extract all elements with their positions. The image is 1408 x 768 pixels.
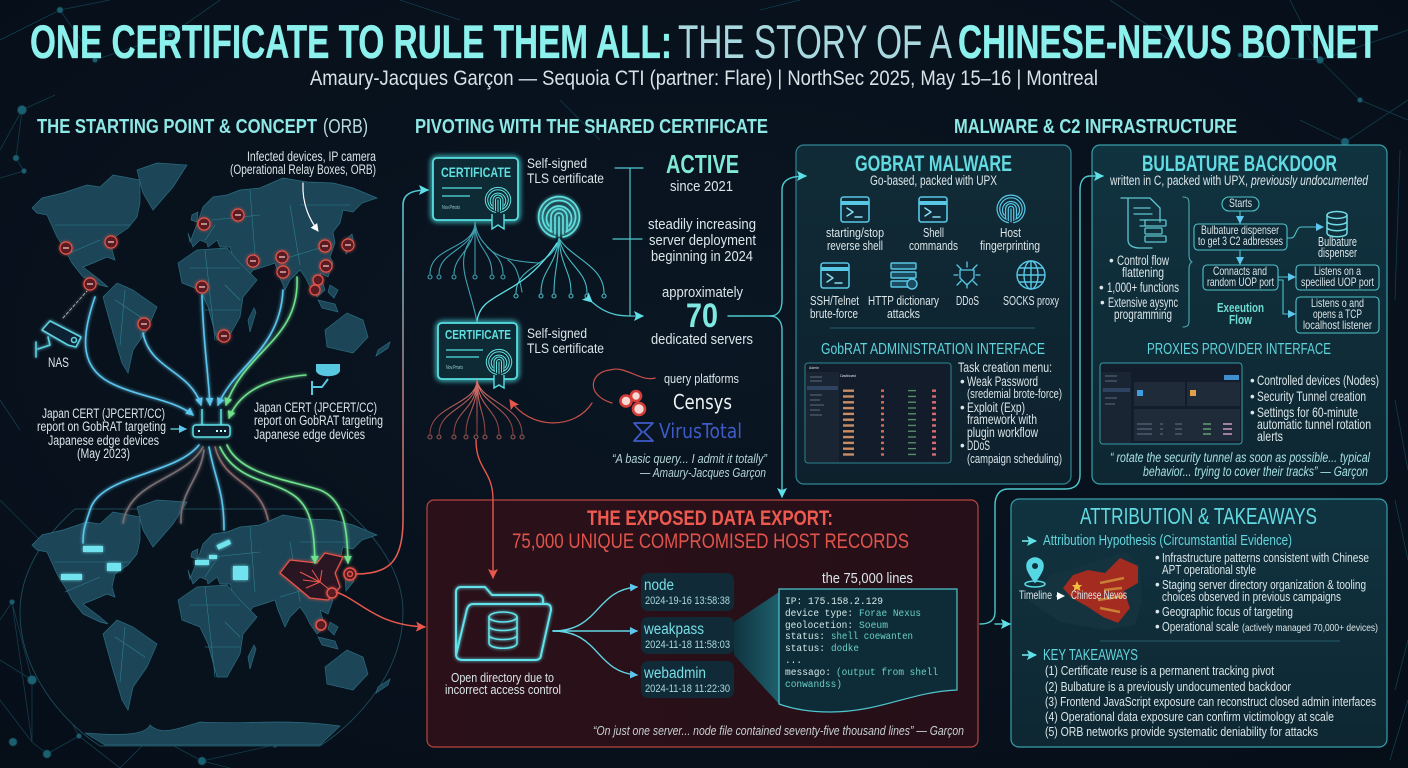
text: Bulbature features: Extensive aysync: [1108, 295, 1178, 310]
flowchart: execution flow: Exeeution: [1217, 300, 1264, 315]
text: Japan CERT left: [37, 406, 186, 461]
icon: open directory folder: [456, 587, 551, 660]
heading: starting point: (ORB): [323, 116, 368, 138]
map: China attribution: [1019, 552, 1142, 630]
capability: reverse shell: [826, 197, 884, 253]
capability: HTTP dictionary: HTTP dictionary: [868, 293, 939, 308]
icon: certificate one: CERTIFICATE: [441, 164, 511, 180]
flowchart: execution flow: to get 3 C2 adbresses: [1198, 234, 1283, 248]
document: sample record: ...: [785, 655, 802, 667]
heading: exposed data export: THE EXPOSED DATA EXPORT:: [587, 507, 833, 530]
card: weakpass file: 2024-11-18 11:58:03: [645, 639, 730, 651]
arrows: folder to files: [553, 587, 637, 675]
query platforms: query platforms: [664, 372, 739, 386]
text: Bulbature features: •: [1109, 253, 1114, 268]
subheading: proxies provider: PROXIES PROVIDER INTERFACE: [1147, 341, 1331, 358]
text: Japan CERT left: (May 2023): [77, 446, 130, 461]
text: task creation menu: DDoS: [967, 438, 990, 453]
card: webadmin file: 2024-11-18 11:22:30: [645, 683, 730, 695]
map: China attribution: Chinese Nevos: [1071, 588, 1127, 602]
list: attribution evidence: •: [1155, 550, 1160, 565]
icon: dome camera: [312, 364, 340, 395]
text: proxies features: [1250, 372, 1379, 444]
capability: DDoS: [954, 262, 980, 308]
subheading: previously undocumented: [1250, 173, 1368, 188]
icon: certificate two: Nov.Pmxts: [446, 365, 463, 371]
text: self-signed two: [527, 326, 604, 356]
text: task creation menu: Exploit (Exp): [967, 400, 1025, 415]
capability: SSH brute force: brute-force: [810, 306, 858, 321]
arrow: China to certificate pivot: [357, 190, 428, 574]
subheading: attribution hypothesis: Attribution Hypothesis (Circumstantial Evidence): [1043, 533, 1292, 549]
icon: database dispenser: Bulbature: [1318, 235, 1357, 249]
text: open directory: [445, 670, 561, 697]
list: attribution evidence: •: [1155, 619, 1160, 634]
icon: certificate one: Nov.Pmxts: [442, 205, 460, 211]
document: sample record: messago:: [785, 667, 831, 679]
heading: starting point: THE STARTING POINT & CONCEPT: [37, 116, 317, 138]
icon: certificate two: [438, 323, 517, 388]
capability: DDoS: DDoS: [956, 293, 979, 308]
document: sample record: geolocetion:: [785, 620, 853, 632]
capability: reverse shell: reverse shell: [827, 238, 883, 253]
stat: active since 2021: ACTIVE: [666, 149, 739, 179]
list: attribution evidence: Geographic focus of targeting: [1162, 604, 1293, 619]
screenshot: GobRAT dashboard: Dashboard: [840, 373, 856, 378]
chart: lower world map of targets: [20, 500, 403, 746]
red target markers: [316, 568, 356, 630]
text: proxies features: alerts: [1257, 428, 1283, 444]
screenshot: proxies dashboard: [1100, 363, 1242, 444]
text: proxies features: Security Tunnel creation: [1257, 388, 1366, 404]
label: NAS: NAS: [48, 355, 69, 370]
title: ONE CERTIFICATE TO RULE THEM ALL:: [30, 15, 672, 68]
text: task creation menu: framework with: [967, 412, 1037, 427]
flowchart: execution flow: Starts: [1229, 196, 1252, 210]
flowchart: execution flow: opens a TCP: [1313, 307, 1362, 321]
chart: upper world map of infected relay boxes: [32, 163, 390, 373]
quote: rotate the tunnel: [1110, 450, 1371, 479]
capability: SOCKS proxy: SOCKS proxy: [1003, 293, 1059, 308]
title: [30, 15, 1378, 68]
text: Bulbature features: •: [1100, 295, 1105, 310]
quote: basic query: “A basic query... I admit it totally”: [612, 452, 768, 466]
flowchart: execution flow: Flow: [1229, 312, 1253, 327]
document: sample record: dodke: [831, 643, 859, 655]
document: sample record: Forae Nexus: [859, 608, 921, 620]
list: key takeaways: (1) Certificate reuse is a permanent tracking pivot: [1045, 663, 1274, 678]
panel: pivoting with the shared certificate: [415, 116, 768, 480]
document: sample record: status:: [785, 631, 825, 643]
list: attribution evidence: •: [1155, 577, 1160, 592]
text: Japan CERT left: Japan CERT (JPCERT/CC): [42, 406, 165, 421]
text: proxies features: •: [1250, 405, 1255, 420]
card: weakpass file: weakpass: [643, 621, 704, 638]
capability: shell commands: Shell: [923, 225, 944, 240]
capability: shell commands: [909, 197, 958, 253]
text: proxies features: automatic tunnel rotation: [1257, 416, 1371, 432]
capability: SSH brute force: SSH/Telnet: [810, 293, 859, 308]
heading: malware and C2: MALWARE & C2 INFRASTRUCTURE: [954, 116, 1237, 138]
text: Bulbature features: programming: [1114, 307, 1172, 322]
text: task creation menu: Weak Password: [967, 374, 1038, 389]
capability: SOCKS proxy: [1003, 261, 1059, 308]
label: the 75,000 lines: the 75,000 lines: [822, 571, 913, 587]
title: THE STORY OF A: [678, 15, 952, 68]
subheading: key takeaways: KEY TAKEAWAYS: [1043, 647, 1138, 664]
flowchart: execution flow: [1194, 196, 1379, 333]
list: attribution evidence: Operational scale: [1162, 619, 1239, 634]
heading: exposed data export: 75,000 UNIQUE COMPROMISED HOST RECORDS: [512, 530, 909, 553]
text: task creation menu: Task creation menu:: [958, 360, 1052, 375]
arrows: router to lower map: [83, 445, 348, 563]
China highlight: [280, 553, 343, 600]
panel: exposed data export: [427, 500, 978, 747]
flowchart: execution flow: localhost listener: [1303, 318, 1372, 332]
document: sample record: Soeum: [859, 620, 888, 632]
stat: active since 2021: since 2021: [670, 178, 733, 195]
tree: certificate two hosts: [428, 380, 524, 439]
arrow: China to data export: [336, 592, 425, 627]
logo: VirusTotal: VirusTotal: [659, 419, 742, 443]
list: key takeaways: (4) Operational data exposure can confirm victimology at scale: [1045, 709, 1334, 724]
logo: Censys: Censys: [673, 390, 732, 414]
callout: infected devices: (Operational Relay Boxes, ORB): [230, 162, 376, 177]
text: Bulbature features: •: [1099, 280, 1104, 295]
subheading: Go-based, packed with UPX: [870, 173, 997, 188]
icon: router: [193, 409, 230, 437]
text: self-signed one: TLS certificate: [527, 171, 604, 186]
text: Japan CERT right: Japanese edge devices: [254, 427, 365, 442]
text: Japan CERT right: [254, 400, 383, 442]
capability: HTTP dictionary: attacks: [887, 306, 920, 321]
icon: location pin: [1025, 558, 1045, 587]
text: task creation menu: •: [960, 438, 965, 453]
panel: GobRAT malware: [796, 145, 1071, 484]
heading: exposed data export: [512, 507, 909, 553]
capability: reverse shell: starting/stop: [826, 225, 884, 240]
capability: host fingerprinting: fingerprinting: [980, 238, 1040, 253]
stat: active since 2021: [666, 149, 739, 195]
capability: SSH brute force: [810, 263, 859, 321]
list: key takeaways: (5) ORB networks provide systematic deniability for attacks: [1045, 724, 1318, 739]
card: webadmin file: webadmin: [643, 665, 706, 682]
stat: approximately 70 servers: approximately: [662, 284, 743, 301]
flowchart: execution flow: random UOP port: [1207, 275, 1274, 289]
text: Japan CERT right: report on GobRAT targeting: [254, 413, 383, 428]
text: open directory: Open directory due to: [451, 670, 554, 685]
document: sample record: conwandss): [785, 679, 842, 691]
text: Bulbature features: [1099, 253, 1179, 322]
text: self-signed two: Self-signed: [527, 326, 587, 341]
document: sample record: IP: 175.158.2.129: [785, 596, 883, 608]
text: self-signed one: [527, 156, 604, 186]
subtitle: Amaury-Jacques Garçon — Sequoia CTI (partner: Flare) | NorthSec 2025, May 15–16 | Montreal: [310, 67, 1098, 90]
capability: host fingerprinting: Host: [1000, 225, 1021, 240]
card: node file: 2024-19-16 13:58:38: [645, 595, 730, 607]
capability: HTTP dictionary: [868, 263, 939, 321]
callout: infected devices: Infected devices, IP camera: [247, 149, 376, 164]
list: attribution evidence: APT operational style: [1162, 562, 1256, 577]
capability: host fingerprinting: [980, 195, 1040, 253]
text: self-signed one: Self-signed: [527, 156, 587, 171]
text: steadily increasing: [648, 216, 757, 265]
card: node file: [641, 573, 734, 611]
card: weakpass file: [641, 617, 734, 654]
stat: approximately 70 servers: dedicated servers: [651, 331, 753, 348]
text: proxies features: Settings for 60-minute: [1257, 404, 1358, 420]
card: node file: node: [644, 577, 674, 594]
list: attribution evidence: choices observed in previous campaigns: [1162, 589, 1341, 604]
arrow: tree to open directory: [476, 440, 493, 578]
document: sample record: (output from shell: [836, 667, 938, 679]
tree: fingerprint hosts: [477, 238, 606, 322]
icon: database dispenser: dispenser: [1318, 246, 1357, 260]
text: task creation menu: [958, 360, 1062, 466]
flowchart: execution flow: Listens o and: [1311, 296, 1364, 310]
subheading: key takeaways: [1022, 647, 1138, 664]
subheading: GobRAT admin: GobRAT ADMINISTRATION INTERFACE: [821, 341, 1045, 358]
device markers: [61, 539, 248, 580]
query platforms: [510, 369, 742, 443]
document: sample record: status:: [785, 643, 825, 655]
text: proxies features: •: [1250, 389, 1255, 404]
text: task creation menu: plugin workflow: [967, 425, 1038, 440]
icon: NAS camera: [36, 291, 87, 357]
map: China attribution: Timeline: [1019, 588, 1052, 602]
text: Japan CERT left: Japanese edge devices: [48, 433, 159, 448]
icon: fingerprint: [539, 197, 579, 237]
screenshot: GobRAT dashboard: Admin: [809, 366, 819, 370]
text: self-signed two: TLS certificate: [527, 341, 604, 356]
capability: shell commands: commands: [909, 238, 958, 253]
text: Japan CERT right: Japan CERT (JPCERT/CC): [254, 400, 377, 415]
flowchart: execution flow: specilied UOP port: [1301, 275, 1374, 289]
text: open directory: incorrect access control: [445, 682, 561, 697]
flowchart: execution flow: Connacts and: [1213, 264, 1267, 278]
screenshot: GobRAT dashboard: [805, 363, 951, 463]
panel: starting point and concept: [20, 116, 403, 746]
text: steadily increasing: beginning in 2024: [651, 248, 753, 265]
icon: Censys dots: [620, 391, 645, 415]
text: Bulbature features: 1,000+ functions: [1107, 280, 1179, 295]
heading: pivoting: PIVOTING WITH THE SHARED CERTIFICATE: [415, 116, 768, 138]
quote: basic query: — Amaury-Jacques Garçon: [639, 466, 766, 480]
text: proxies features: •: [1250, 373, 1255, 388]
text: steadily increasing: steadily increasing: [648, 216, 756, 233]
list: key takeaways: [1045, 663, 1376, 739]
heading: attribution: ATTRIBUTION & TAKEAWAYS: [1080, 503, 1317, 529]
markers: infected locations: [60, 209, 354, 342]
text: task creation menu: •: [960, 400, 965, 415]
text: steadily increasing: server deployment: [649, 232, 757, 249]
icon: database dispenser: [1318, 212, 1357, 260]
arrows: map to router: [85, 277, 306, 418]
list: attribution evidence: [1155, 550, 1378, 634]
heading: GobRAT: GOBRAT MALWARE: [855, 151, 1012, 176]
panel: Bulbature backdoor: [1092, 145, 1387, 484]
flowchart: execution flow: Listens on a: [1314, 264, 1361, 278]
text: task creation menu: •: [960, 374, 965, 389]
heading: Bulbature: BULBATURE BACKDOOR: [1142, 151, 1337, 176]
quote: seventy-five thousand lines: “On just one server... node file contained seventy-five thousand lines” — Garçon: [593, 723, 964, 738]
document: sample record: device type:: [785, 608, 853, 620]
subheading: written in C, packed with UPX,: [1109, 173, 1248, 188]
flowchart: execution flow: Bulbature dispenser: [1201, 223, 1279, 237]
text: Japan CERT left: report on GobRAT targeting: [37, 419, 166, 434]
quote: basic query: [612, 452, 768, 480]
panel: attribution and takeaways: [1011, 499, 1387, 747]
document: sample record: shell coewanten: [831, 631, 913, 643]
icon: code document: [1121, 198, 1166, 248]
text: Bulbature features: Control flow: [1117, 253, 1169, 268]
icon: VirusTotal sigma: [634, 423, 653, 441]
icon: certificate one: [433, 158, 518, 229]
stat: approximately 70 servers: [651, 284, 753, 348]
text: task creation menu: (campaign scheduling): [967, 452, 1062, 466]
stat: approximately 70 servers: 70: [686, 297, 718, 335]
icon: certificate two: CERTIFICATE: [445, 327, 511, 342]
callout: infected devices: [230, 149, 376, 231]
arrows: 70 servers to malware panels: [728, 176, 806, 497]
list: attribution evidence: (actively managed 70,000+ devices): [1242, 622, 1378, 634]
card: webadmin file: [641, 661, 734, 698]
tree: certificate one hosts: [428, 222, 540, 322]
wedge: zoom connector: [734, 592, 779, 704]
list: key takeaways: (2) Bulbature is a previously undocumented backdoor: [1045, 679, 1292, 694]
text: task creation menu: (sredemial brote-force): [967, 387, 1062, 401]
text: Bulbature features: flattening: [1122, 265, 1164, 280]
document: sample record: [779, 589, 957, 712]
list: attribution evidence: •: [1155, 604, 1160, 619]
arrow: to Bulbature and attribution: [980, 171, 1104, 624]
bracket: timeline: [592, 168, 643, 316]
